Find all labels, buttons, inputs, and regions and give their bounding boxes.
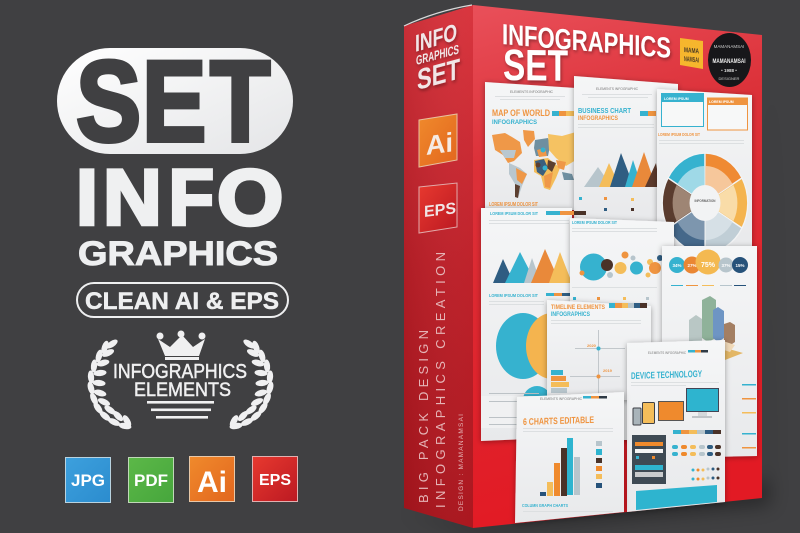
black stamp logo: • 1988 • bbox=[721, 68, 737, 73]
timeline axis bbox=[570, 330, 625, 398]
chart legend bbox=[596, 441, 602, 488]
sheet: six charts editable: 6 CHARTS EDITABLE bbox=[523, 415, 594, 428]
side title: SET bbox=[417, 53, 460, 97]
emblem subtitle: ELEMENTS bbox=[134, 379, 231, 401]
sheet: hexagon wheel: LOREM IPSUM DOLOR SIT bbox=[658, 132, 700, 137]
sheet: business chart: BUSINESS CHART bbox=[578, 106, 631, 115]
INFO heading: I bbox=[76, 152, 98, 242]
sheet: six charts editable: ELEMENTS INFOGRAPHIC bbox=[540, 396, 582, 401]
sheet: device technology bbox=[627, 340, 725, 512]
yellow logo badge bbox=[680, 38, 703, 69]
sheet: bubble chart: LOREM IPSUM DOLOR SIT bbox=[572, 220, 617, 225]
sheet: map of world: INFOGRAPHICS bbox=[492, 119, 538, 126]
SET pill heading: T bbox=[210, 37, 270, 166]
timeline axis: 2020 bbox=[587, 343, 597, 348]
SET pill heading: E bbox=[142, 37, 206, 166]
side Ai tile bbox=[419, 114, 457, 167]
venn diagram bbox=[496, 313, 578, 414]
format badges bbox=[66, 456, 298, 502]
badge: Ai bbox=[190, 456, 234, 502]
sheet: triangles and venn bbox=[481, 208, 586, 441]
percentage bubbles: 34% bbox=[672, 263, 682, 268]
sheet: device technology: ELEMENTS INFOGRAPHIC bbox=[648, 351, 686, 355]
front title bbox=[502, 19, 671, 91]
sheet: map of world: LOREM IPSUM DOLOR SIT bbox=[489, 202, 538, 208]
sheet: triangles and venn: LOREM IPSUM DOLOR SIT bbox=[489, 293, 538, 298]
black stamp logo: MAMANAMSAI bbox=[712, 58, 746, 65]
badge: Ai: Ai bbox=[197, 466, 227, 499]
side EPS tile bbox=[419, 183, 457, 233]
login panel bbox=[632, 435, 666, 484]
sheet: triangles and venn: LOREM IPSUM DOLOR SIT bbox=[490, 211, 538, 216]
yellow logo badge: NAMSAI bbox=[684, 56, 699, 64]
badge: PDF: PDF bbox=[134, 471, 168, 490]
sheet: hexagon wheel bbox=[657, 89, 752, 253]
emblem title: INFOGRAPHICS bbox=[113, 361, 247, 383]
sheet: map of world: MAP OF WORLD bbox=[492, 108, 550, 118]
SET pill heading: S bbox=[76, 36, 141, 166]
percentage bubbles: 15% bbox=[735, 263, 745, 268]
badge: PDF bbox=[128, 458, 174, 502]
percentage bubbles: 37% bbox=[721, 263, 731, 268]
front title: SET bbox=[503, 41, 568, 91]
triangle chart bbox=[584, 152, 660, 187]
product box bbox=[404, 5, 762, 528]
sheet: timeline bbox=[547, 300, 651, 400]
teal block bbox=[636, 485, 717, 510]
icon: crown bbox=[156, 330, 206, 360]
sheet: business chart: ELEMENTS INFOGRAPHIC bbox=[596, 86, 638, 91]
orange text box: LOREM IPSUM bbox=[709, 100, 734, 104]
triangle chart bbox=[493, 249, 572, 283]
percentage bubbles bbox=[669, 250, 748, 274]
world map bbox=[492, 130, 576, 198]
GRAPHICS heading: GRAPHICS bbox=[78, 235, 278, 273]
side vertical captions bbox=[416, 252, 465, 511]
laurel emblem bbox=[86, 330, 275, 430]
badge: EPS: EPS bbox=[259, 472, 291, 489]
timeline axis: 2019 bbox=[603, 368, 613, 373]
bubbles bbox=[580, 252, 663, 280]
INFO heading bbox=[76, 152, 283, 242]
side title: INFO bbox=[415, 19, 457, 58]
sheet: timeline: TIMELINE ELEMENTS bbox=[551, 304, 606, 311]
toggle buttons and dots bbox=[672, 445, 721, 480]
orange text box bbox=[707, 98, 748, 130]
side vertical captions: DESIGN : MAMANAMSAI bbox=[458, 414, 465, 511]
icon: left laurel bbox=[86, 338, 133, 430]
box shadow bbox=[404, 60, 772, 533]
SET pill heading bbox=[57, 36, 293, 166]
side Ai tile: Ai bbox=[426, 126, 453, 161]
sheet: map of world bbox=[485, 82, 576, 210]
teal text box: LOREM IPSUM bbox=[664, 97, 689, 101]
INFO heading: N bbox=[103, 153, 162, 241]
black stamp logo bbox=[708, 33, 751, 87]
hexagon wheel chart bbox=[662, 153, 748, 253]
hexagon wheel chart: INFORMATION bbox=[695, 199, 716, 203]
black stamp logo: MAMANAMSAI bbox=[714, 44, 744, 49]
chart legend bbox=[579, 197, 634, 211]
sheet: business chart: INFOGRAPHICS bbox=[578, 116, 618, 122]
side title bbox=[415, 19, 460, 97]
sheet: six charts editable: COLUMN GRAPH CHARTS bbox=[522, 503, 568, 508]
INFO heading: F bbox=[169, 154, 214, 242]
INFO heading: O bbox=[217, 154, 283, 242]
icon: right laurel bbox=[228, 338, 275, 430]
sheet: map of world: ELEMENTS INFOGRAPHIC bbox=[510, 89, 553, 94]
column chart bbox=[540, 438, 580, 496]
badge: JPG bbox=[66, 458, 110, 502]
black stamp logo: DESIGNER bbox=[719, 76, 740, 81]
yellow logo badge: MAMA bbox=[684, 47, 699, 55]
device icons bbox=[633, 388, 718, 425]
bubble legend bbox=[573, 297, 649, 300]
sheet: bubble chart bbox=[570, 218, 674, 440]
teal text box bbox=[661, 93, 704, 126]
side EPS tile: EPS bbox=[424, 199, 456, 221]
box front panel bbox=[473, 5, 762, 528]
side title: GRAPHICS bbox=[416, 42, 459, 68]
percentage bubbles: 27% bbox=[687, 263, 697, 268]
percentage bubbles: 75% bbox=[701, 262, 716, 269]
icon: isometric buildings bbox=[689, 296, 743, 360]
sheet: device technology: DEVICE TECHNOLOGY bbox=[631, 369, 702, 382]
sheet: six charts editable bbox=[515, 392, 624, 523]
emblem underlines bbox=[147, 401, 214, 419]
box side panel bbox=[404, 5, 473, 528]
side vertical captions: INFOGRAPHICS CREATION bbox=[433, 252, 448, 508]
front title: INFOGRAPHICS bbox=[502, 19, 671, 65]
side vertical captions: BIG PACK DESIGN bbox=[416, 330, 431, 503]
CLEAN AI and EPS badge: CLEAN AI & EPS bbox=[85, 288, 279, 315]
side labels bbox=[742, 384, 756, 448]
badge: EPS bbox=[252, 456, 298, 502]
badge: JPG: JPG bbox=[71, 471, 105, 490]
sheet: business chart bbox=[574, 76, 678, 222]
icon rows bbox=[551, 370, 569, 393]
sheet: timeline: INFOGRAPHICS bbox=[551, 312, 590, 318]
sheet: percentages and buildings bbox=[662, 246, 757, 458]
